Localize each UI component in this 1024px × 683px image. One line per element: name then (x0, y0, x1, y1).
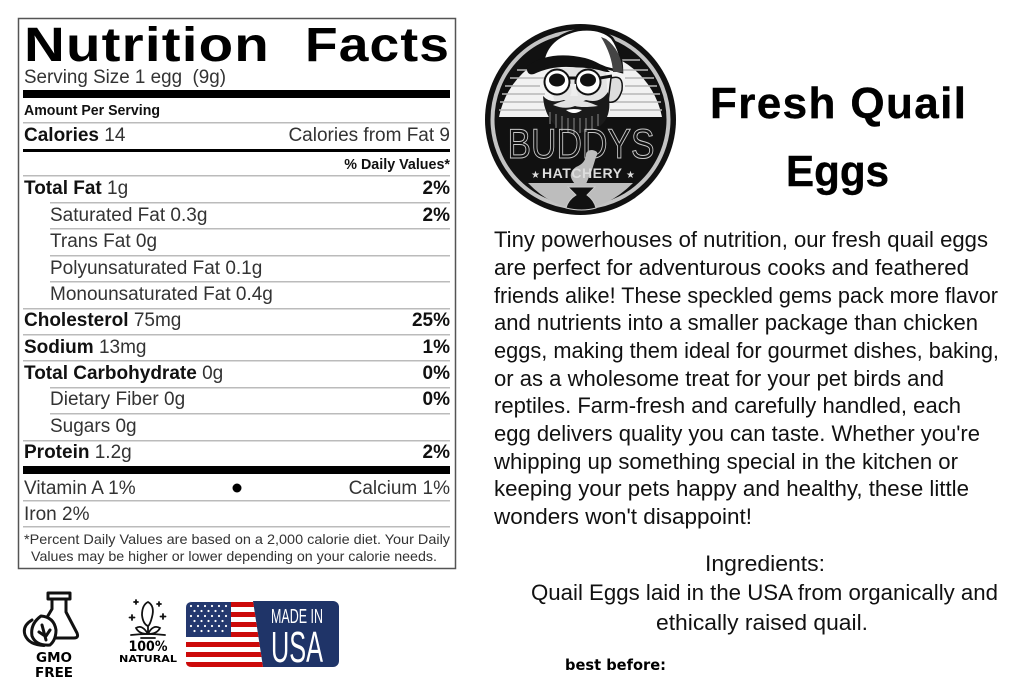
ear (608, 77, 622, 102)
vitamins row (24, 478, 450, 499)
sunglasses (544, 68, 612, 96)
divider under calories (23, 149, 450, 152)
total carbohydrate row: 0% (423, 363, 450, 384)
protein row (24, 442, 450, 463)
description text: or as a wholesome treat for your pet birds and (494, 366, 944, 391)
thick divider top (23, 90, 450, 98)
trans fat row: Trans Fat 0g (50, 231, 157, 252)
saturated fat row (50, 205, 450, 226)
icon: 100% natural: NATURAL (119, 654, 178, 665)
icon: 100% natural (119, 600, 178, 665)
saturated fat row: 2% (423, 205, 450, 226)
description text: reptiles. Farm-fresh and carefully handled, each (494, 393, 961, 418)
protein row: 2% (423, 442, 450, 463)
saturated fat row: Saturated Fat 0.3g (50, 205, 207, 226)
buddys wordmark: BUDDYS (508, 120, 654, 167)
vitamins row: Vitamin A 1% (24, 478, 136, 499)
description text: friends alike! These speckled gems pack more flavor (494, 283, 998, 308)
heading: nutrition facts: Facts (305, 19, 450, 72)
cholesterol row: Cholesterol 75mg (24, 310, 181, 331)
calories row: Calories from Fat 9 (288, 125, 450, 146)
calories row: Calories 14 (24, 125, 126, 146)
heading: nutrition facts (24, 19, 450, 72)
heading: product name: Fresh Quail (710, 79, 966, 128)
icon: gmo free: GMO (36, 650, 72, 666)
daily values header: % Daily Values* (344, 157, 450, 173)
sodium row: 1% (423, 337, 450, 358)
vitamins row: Calcium 1% (349, 478, 450, 499)
total fat row: Total Fat 1g (24, 178, 128, 199)
hatchery wordmark: HATCHERY (542, 165, 623, 181)
footnote (24, 531, 450, 564)
dietary fiber row (50, 389, 450, 410)
icon: gmo free: FREE (35, 665, 73, 681)
logo: buddys hatchery: ★ (531, 170, 540, 181)
dietary fiber row: Dietary Fiber 0g (50, 389, 185, 410)
ingredients: Ingredients: (705, 551, 825, 576)
protein row: Protein 1.2g (24, 442, 132, 463)
cap (527, 29, 623, 74)
badge: made in usa flag (186, 601, 339, 672)
footnote: Values may be higher or lower depending on your calorie needs. (31, 548, 437, 564)
logo: buddys hatchery (485, 24, 676, 215)
description text: egg delivers quality you can taste. Whether you're (494, 421, 980, 446)
quail (571, 150, 597, 184)
monounsaturated fat row: Monounsaturated Fat 0.4g (50, 284, 273, 305)
cholesterol row (24, 310, 450, 331)
description text: Tiny powerhouses of nutrition, our fresh quail eggs (494, 227, 988, 252)
description text: are perfect for adventurous cooks and feathered (494, 255, 969, 280)
ingredients: ethically raised quail. (656, 610, 868, 635)
thick divider bottom (23, 466, 450, 474)
heading: product name: Eggs (786, 147, 889, 196)
description text: wonders won't disappoint! (493, 504, 752, 529)
icon: 100% natural: 100% (128, 639, 168, 655)
footnote: *Percent Daily Values are based on a 2,000 calorie diet. Your Daily (24, 531, 450, 547)
description text: and nutrients into a smaller package than chicken (494, 310, 978, 335)
total fat row (24, 178, 450, 199)
cholesterol row: 25% (412, 310, 450, 331)
total fat row: 2% (423, 178, 450, 199)
badge: made in usa flag: MADE IN (271, 606, 323, 628)
sodium row (24, 337, 450, 358)
ingredients: Quail Eggs laid in the USA from organically and (531, 580, 998, 605)
total carbohydrate row: Total Carbohydrate 0g (24, 363, 223, 384)
nest (566, 187, 596, 210)
amount per serving: Amount Per Serving (24, 103, 160, 119)
description text: keeping your pets happy and healthy, these little (494, 476, 969, 501)
total carbohydrate row (24, 363, 450, 384)
description text (493, 227, 999, 529)
ingredients (531, 551, 998, 635)
best before label: best before: (565, 656, 666, 674)
icon: gmo free (24, 593, 78, 681)
badge: made in usa flag: USA (271, 623, 323, 672)
sugars row: Sugars 0g (50, 416, 137, 437)
polyunsaturated fat row: Polyunsaturated Fat 0.1g (50, 258, 262, 279)
calories row (24, 125, 450, 146)
dietary fiber row: 0% (423, 389, 450, 410)
sodium row: Sodium 13mg (24, 337, 146, 358)
heading: product name (710, 79, 966, 196)
face (550, 67, 608, 116)
beard (543, 92, 609, 134)
heading: nutrition facts: Nutrition (24, 19, 270, 72)
description text: eggs, making them ideal for gourmet dishes, baking, (494, 338, 999, 363)
serving size: Serving Size 1 egg (9g) (24, 67, 226, 88)
description text: whipping up something special in the kitchen or (493, 449, 958, 474)
panel: nutrition facts label (18, 18, 456, 568)
iron row: Iron 2% (24, 504, 90, 525)
logo: buddys hatchery: ★ (626, 170, 635, 181)
